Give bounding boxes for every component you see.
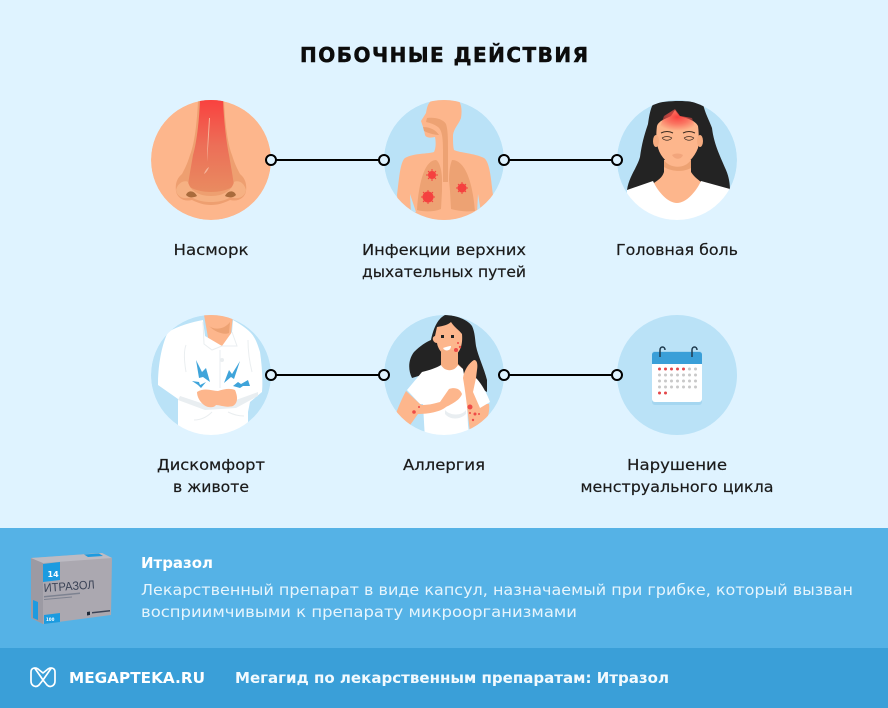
- label: menstrual cycle disorder: Нарушение: [627, 456, 727, 474]
- icon: medicine box: 100: [46, 617, 55, 622]
- icon: medicine box: [31, 553, 112, 624]
- icon: nose: [151, 100, 271, 220]
- connector: row 1 left: [266, 155, 389, 165]
- icon: medicine box: 14: [48, 570, 59, 579]
- label: headache: Головная боль: [616, 241, 738, 259]
- connector: row 1 right: [499, 155, 622, 165]
- label: runny nose: Насморк: [174, 241, 248, 259]
- footer guide text: Мегагид по лекарственным препаратам: Итразол: [235, 669, 669, 687]
- drug name: Итразол: [141, 554, 213, 572]
- icon: woman with headache: [617, 100, 737, 225]
- label: stomach discomfort: [157, 456, 265, 496]
- icon: calendar circle: [617, 315, 737, 435]
- connector: row 2 right: [499, 370, 622, 380]
- label: menstrual cycle disorder: [580, 456, 774, 496]
- icon: medicine box: ИТРАЗОЛ: [43, 577, 95, 595]
- label: menstrual cycle disorder: менструального цикла: [580, 478, 774, 496]
- brand name: MEGAPTEKA.RU: [69, 669, 205, 687]
- label: allergy: Аллергия: [403, 456, 485, 474]
- panel: drug description: [0, 528, 888, 648]
- drug description text: восприимчивыми к препарату микроорганизмами: [141, 603, 577, 621]
- icon: respiratory system: [384, 100, 504, 225]
- label: stomach discomfort: в животе: [173, 478, 249, 496]
- icon: megapteka logo: [31, 668, 55, 686]
- label: upper respiratory infections: [362, 241, 526, 281]
- drug description text: Лекарственный препарат в виде капсул, назначаемый при грибке, который вызван: [141, 581, 853, 599]
- label: upper respiratory infections: Инфекции верхних: [362, 241, 526, 259]
- drug description text: [141, 581, 853, 621]
- connector: row 2 left: [266, 370, 389, 380]
- icon: calendar: [652, 347, 702, 405]
- icon: man with stomach ache: [151, 315, 271, 440]
- title: ПОБОЧНЫЕ ДЕЙСТВИЯ: [300, 43, 588, 67]
- label: upper respiratory infections: дыхательных путей: [362, 263, 526, 281]
- label: stomach discomfort: Дискомфорт: [157, 456, 265, 474]
- icon: woman with allergic rash: [384, 315, 504, 440]
- footer: [0, 648, 888, 708]
